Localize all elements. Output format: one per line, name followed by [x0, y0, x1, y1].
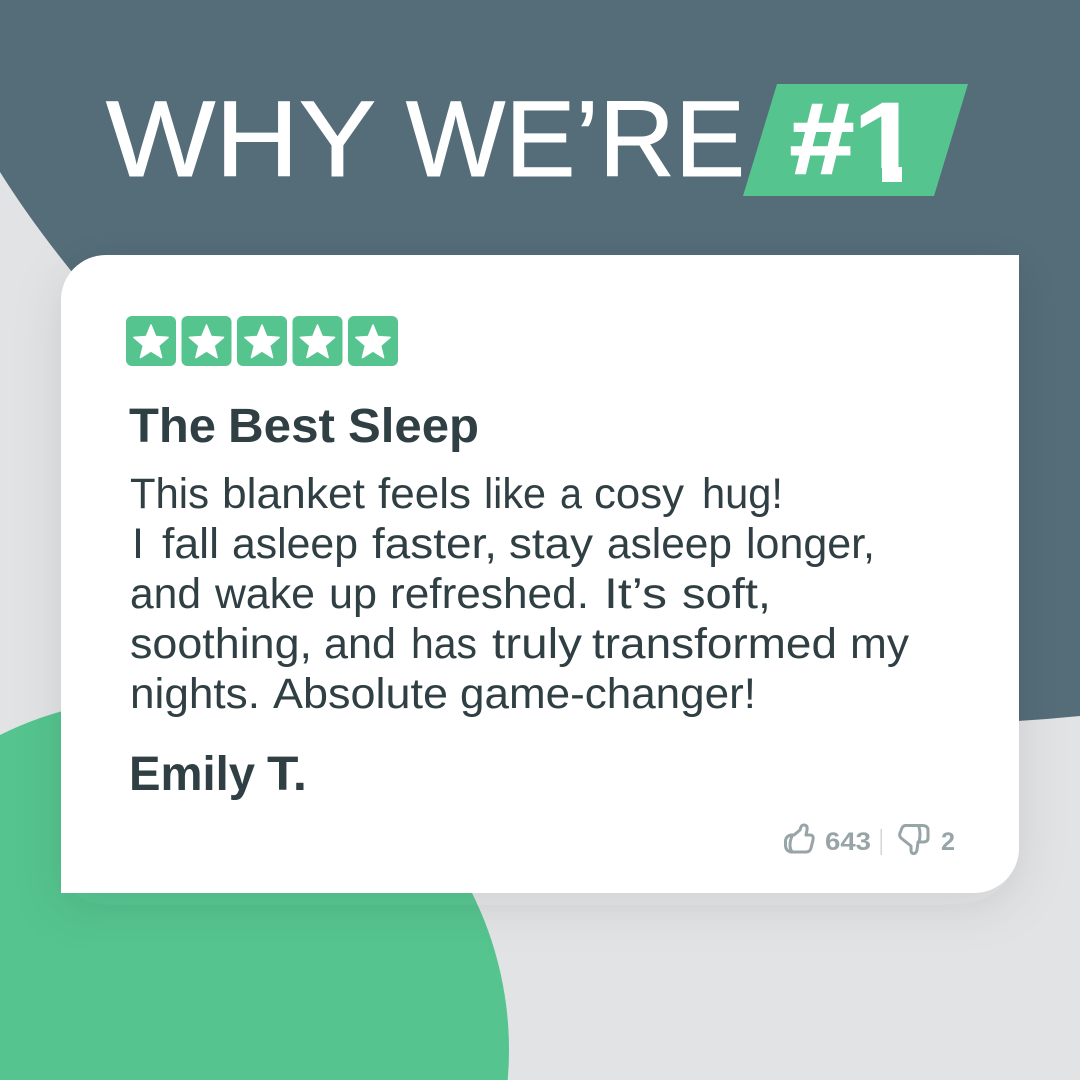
- title text: WE’RE: [406, 78, 745, 199]
- review body text: like: [484, 470, 546, 518]
- review body text: transformed: [592, 620, 837, 668]
- review body text: faster,: [372, 520, 497, 568]
- title: [106, 84, 968, 196]
- review body text: cosy: [594, 470, 685, 518]
- review body text: hug!: [702, 470, 783, 518]
- title text: WHY: [106, 78, 374, 199]
- review body text: fall: [162, 520, 219, 568]
- review heading: Best: [228, 400, 335, 453]
- vote counts: [786, 825, 955, 856]
- review body text: blanket: [222, 470, 365, 518]
- star rating: [126, 316, 398, 366]
- review body text: asleep: [607, 520, 732, 568]
- review body text: nights.: [130, 670, 260, 718]
- icon: thumbs up: [786, 825, 813, 852]
- review body text: [130, 470, 910, 718]
- review body text: up: [329, 570, 377, 618]
- review heading: The: [129, 400, 216, 453]
- review body text: stay: [509, 520, 594, 568]
- background shape: green circle: [0, 698, 509, 1080]
- panel: review card: [61, 255, 1019, 893]
- upvote count: 643: [825, 828, 871, 856]
- review body text: has: [411, 620, 477, 668]
- review body text: game-changer!: [460, 670, 756, 718]
- review body text: and: [130, 570, 201, 618]
- review body text: a: [560, 470, 582, 518]
- badge: #1: 1: [852, 78, 922, 207]
- review body text: soft,: [682, 570, 771, 618]
- review heading: Sleep: [348, 400, 479, 453]
- review body text: It’s: [604, 570, 667, 618]
- badge: #1: [743, 84, 968, 196]
- review body text: This: [130, 470, 209, 518]
- review body text: feels: [378, 470, 471, 518]
- review body text: Absolute: [273, 670, 448, 718]
- reviewer name: T.: [267, 748, 307, 801]
- downvote count: 2: [941, 828, 955, 856]
- reviewer name: Emily: [129, 748, 255, 801]
- review body text: and: [324, 620, 396, 668]
- review body text: soothing,: [130, 620, 312, 668]
- badge: #1: #: [790, 83, 854, 195]
- review body text: truly: [492, 620, 583, 668]
- background shape: slate blob: [0, 0, 1080, 722]
- review body text: asleep: [232, 520, 358, 568]
- review body text: my: [850, 620, 910, 668]
- review body text: I: [132, 520, 144, 568]
- review body text: refreshed.: [390, 570, 589, 618]
- review body text: longer,: [746, 520, 875, 568]
- icon: thumbs down: [900, 826, 928, 854]
- review body text: wake: [214, 570, 315, 618]
